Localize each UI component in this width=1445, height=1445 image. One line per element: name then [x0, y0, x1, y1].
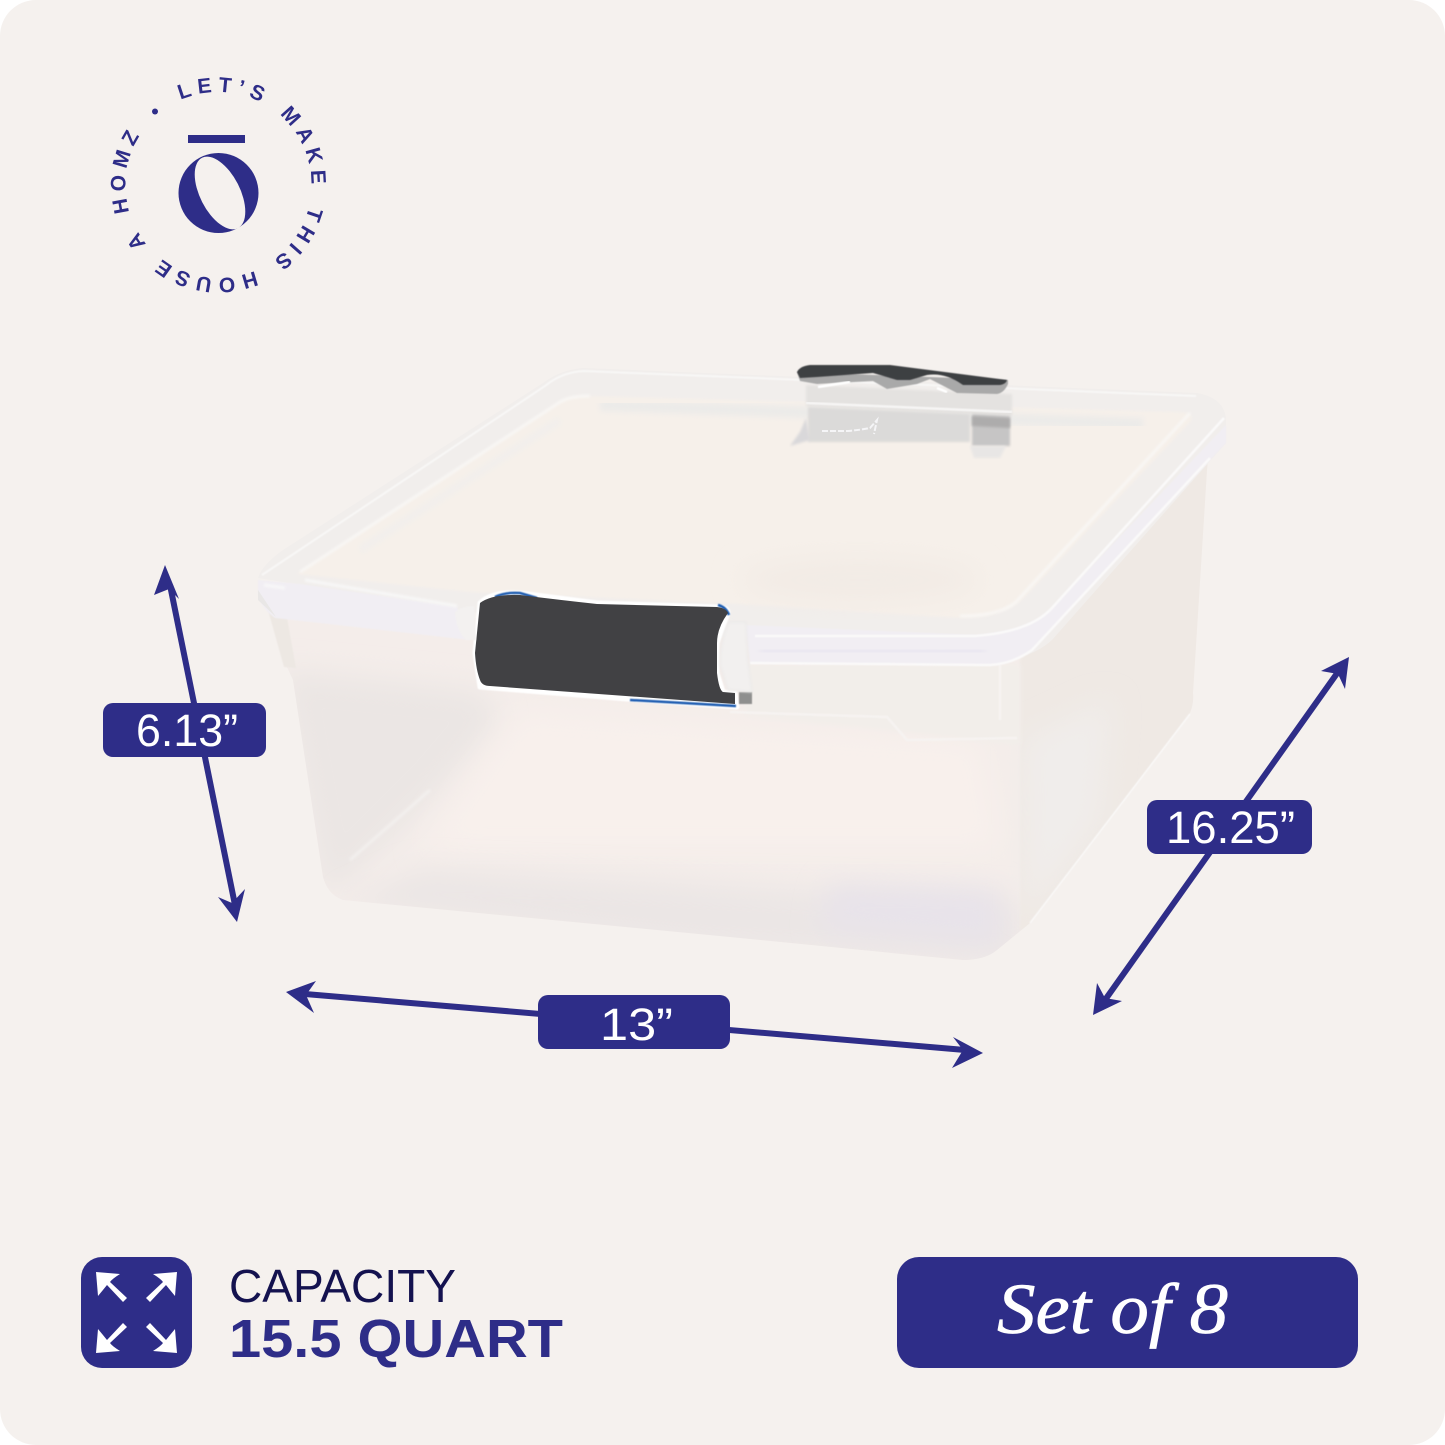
- front latch: [455, 593, 752, 707]
- depth dimension: [1093, 657, 1349, 1015]
- height arrow: [154, 565, 245, 922]
- lid outer highlight: [262, 371, 1196, 575]
- bin body: [268, 440, 1210, 965]
- bottom right edge highlight: [1030, 714, 1190, 923]
- set of 8 badge: [897, 1257, 1358, 1368]
- latch dark handle: [475, 595, 735, 704]
- circular slogan: LET’S MAKE THIS HOUSE A HOMZ: [110, 77, 326, 292]
- strap dark end: [972, 414, 1010, 446]
- front strip shade: [432, 891, 812, 936]
- logo ring: [178, 149, 258, 237]
- depth label: 16.25”: [1166, 802, 1295, 853]
- left tab: [268, 610, 296, 668]
- rim highlights: [750, 418, 1224, 665]
- storage bin photo illustration: [258, 365, 1226, 965]
- floor highlight: [420, 710, 1000, 850]
- strap light line: [806, 403, 1012, 412]
- strap script mark: [822, 420, 877, 434]
- lavender floor tint: [820, 885, 1000, 945]
- lid inner highlight: [300, 396, 1190, 616]
- strap left blob: [790, 418, 810, 446]
- side wall light zone: [1024, 700, 1110, 915]
- height dimension: [103, 565, 266, 922]
- lid inner panel: [297, 396, 1192, 618]
- capacity value: 15.5 QUART: [229, 1309, 563, 1369]
- corner crease: [350, 790, 430, 860]
- latch strap upper: [806, 385, 1012, 416]
- inner ledge: [730, 665, 1017, 740]
- latch highlights: [818, 382, 947, 392]
- strap foot: [970, 446, 1006, 458]
- capacity block: [81, 1257, 563, 1369]
- rim front right: [745, 425, 1226, 665]
- latch right clip: [720, 622, 752, 692]
- logo badge: [110, 77, 326, 292]
- latch pin: [739, 692, 752, 704]
- width label: [538, 995, 730, 1050]
- lid outer band: [258, 368, 1226, 662]
- width arrow: [286, 981, 983, 1068]
- latch strap lower: [808, 407, 970, 442]
- latch blue edge: [495, 593, 736, 706]
- capacity icon: [81, 1257, 192, 1368]
- height label: 6.13”: [136, 705, 238, 756]
- latch halo: [475, 593, 737, 707]
- set of 8 badge: Set of 8: [997, 1269, 1228, 1349]
- width label: 13”: [600, 999, 673, 1050]
- side wall: [1020, 450, 1210, 930]
- width dimension: [286, 981, 983, 1068]
- left wall shade: [307, 692, 469, 858]
- rim front left: [258, 580, 470, 640]
- lid soft shadow: [740, 558, 980, 602]
- logo bar: [188, 135, 245, 143]
- latch left clip: [455, 606, 476, 640]
- latch grip lower edge: [797, 372, 1008, 394]
- height label: [103, 703, 266, 757]
- upper front wall: [745, 665, 1020, 745]
- capacity label: CAPACITY: [229, 1260, 456, 1312]
- logo dot: [152, 108, 158, 114]
- bin lid: [258, 368, 1226, 665]
- back latch: [790, 365, 1012, 458]
- lid back recess: [600, 405, 1143, 424]
- latch dark grip: [797, 365, 1007, 385]
- depth arrow: [1093, 657, 1349, 1015]
